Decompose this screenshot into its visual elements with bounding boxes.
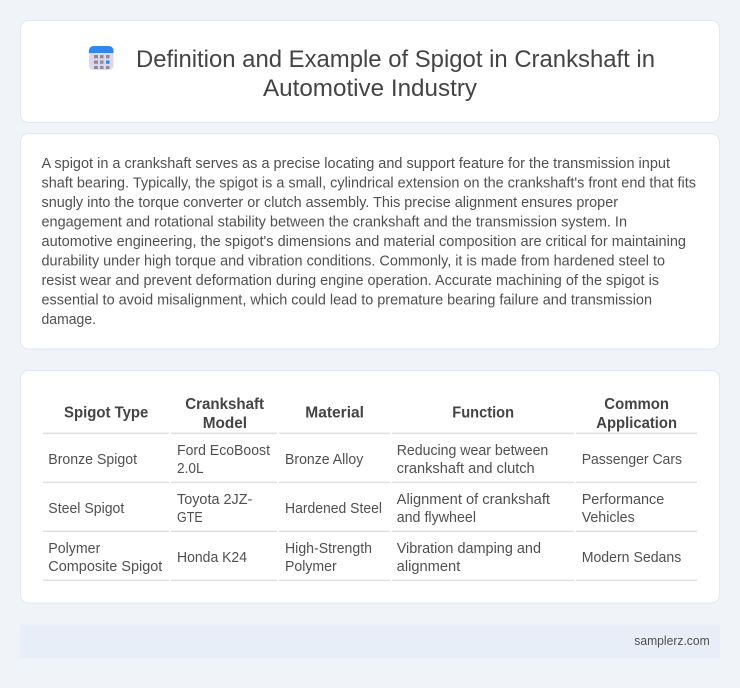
table header: Common bbox=[604, 396, 669, 413]
table row: steel spigot bbox=[43, 492, 697, 532]
table row: polymer composite spigot: Vibration damping and bbox=[397, 541, 541, 557]
panel: definition paragraph bbox=[20, 134, 720, 349]
table row: bronze spigot: crankshaft and clutch bbox=[397, 461, 535, 477]
text block: definition bbox=[42, 156, 696, 328]
table row: polymer composite spigot: Composite Spigot bbox=[48, 559, 162, 575]
text block: definition: engagement and rotational stability between the crankshaft and the transmission system. In bbox=[42, 214, 627, 230]
table row: bronze spigot bbox=[43, 443, 697, 483]
text block: definition: durability under high torque and vibration conditions. Commonly, it is made from hardened steel to bbox=[42, 254, 665, 270]
table row: steel spigot: Toyota 2JZ- bbox=[177, 492, 252, 508]
table row: bronze spigot: 2.0L bbox=[177, 461, 204, 477]
table header: Material bbox=[305, 405, 364, 422]
footer source text: samplerz.com bbox=[634, 634, 710, 648]
table row: polymer composite spigot: High-Strength bbox=[285, 541, 372, 557]
table row: bronze spigot: Passenger Cars bbox=[582, 452, 682, 468]
text block: definition: resist wear and prevent deformation during engine operation. Accurate machining of the spigot is bbox=[42, 273, 659, 289]
footer bar bbox=[20, 624, 720, 658]
table row: polymer composite spigot: Polymer bbox=[48, 541, 100, 557]
title: Definition and Example of Spigot in Crankshaft in bbox=[136, 46, 655, 73]
table row: bronze spigot: Ford EcoBoost bbox=[177, 443, 270, 459]
table row: steel spigot: GTE bbox=[177, 510, 203, 526]
text block: definition: automotive engineering, the spigot's dimensions and material composition are critical for maintaining bbox=[42, 234, 686, 250]
table row: steel spigot: Alignment of crankshaft bbox=[397, 492, 550, 508]
table row: bronze spigot: Reducing wear between bbox=[397, 443, 548, 459]
table row: polymer composite spigot: Modern Sedans bbox=[582, 550, 681, 566]
panel: title card bbox=[20, 20, 720, 122]
icon: calendar bbox=[89, 46, 114, 70]
table row: steel spigot: Vehicles bbox=[582, 510, 635, 526]
text block: definition: snugly into the torque converter or clutch assembly. This precise alignment ensures proper bbox=[42, 195, 618, 211]
text block: definition: A spigot in a crankshaft serves as a precise locating and support feature for the transmission input bbox=[42, 156, 670, 172]
text block: definition: damage. bbox=[42, 312, 96, 328]
table row: polymer composite spigot bbox=[43, 541, 697, 581]
table row: steel spigot: and flywheel bbox=[397, 510, 476, 526]
table row: steel spigot: Steel Spigot bbox=[48, 501, 124, 517]
panel: spigot table bbox=[20, 370, 720, 603]
text block: definition: shaft bearing. Typically, the spigot is a small, cylindrical extension on the crankshaft's front end that fits bbox=[42, 176, 696, 192]
table row: polymer composite spigot: Polymer bbox=[285, 559, 337, 575]
table row: bronze spigot: Bronze Alloy bbox=[285, 452, 364, 468]
table header: Function bbox=[452, 405, 514, 422]
table header: Model bbox=[203, 415, 247, 432]
table header bbox=[43, 396, 697, 434]
table row: polymer composite spigot: alignment bbox=[397, 559, 460, 575]
table row: steel spigot: Performance bbox=[582, 492, 664, 508]
table header: Application bbox=[596, 415, 677, 432]
title bbox=[136, 46, 655, 102]
table header: Spigot Type bbox=[64, 405, 148, 422]
table header: Crankshaft bbox=[185, 396, 265, 413]
table row: polymer composite spigot: Honda K24 bbox=[177, 550, 247, 566]
title: Automotive Industry bbox=[263, 75, 477, 102]
text block: definition: essential to avoid misalignment, which could lead to premature bearing failure and transmission bbox=[42, 292, 652, 308]
table row: bronze spigot: Bronze Spigot bbox=[48, 452, 137, 468]
table row: steel spigot: Hardened Steel bbox=[285, 501, 382, 517]
